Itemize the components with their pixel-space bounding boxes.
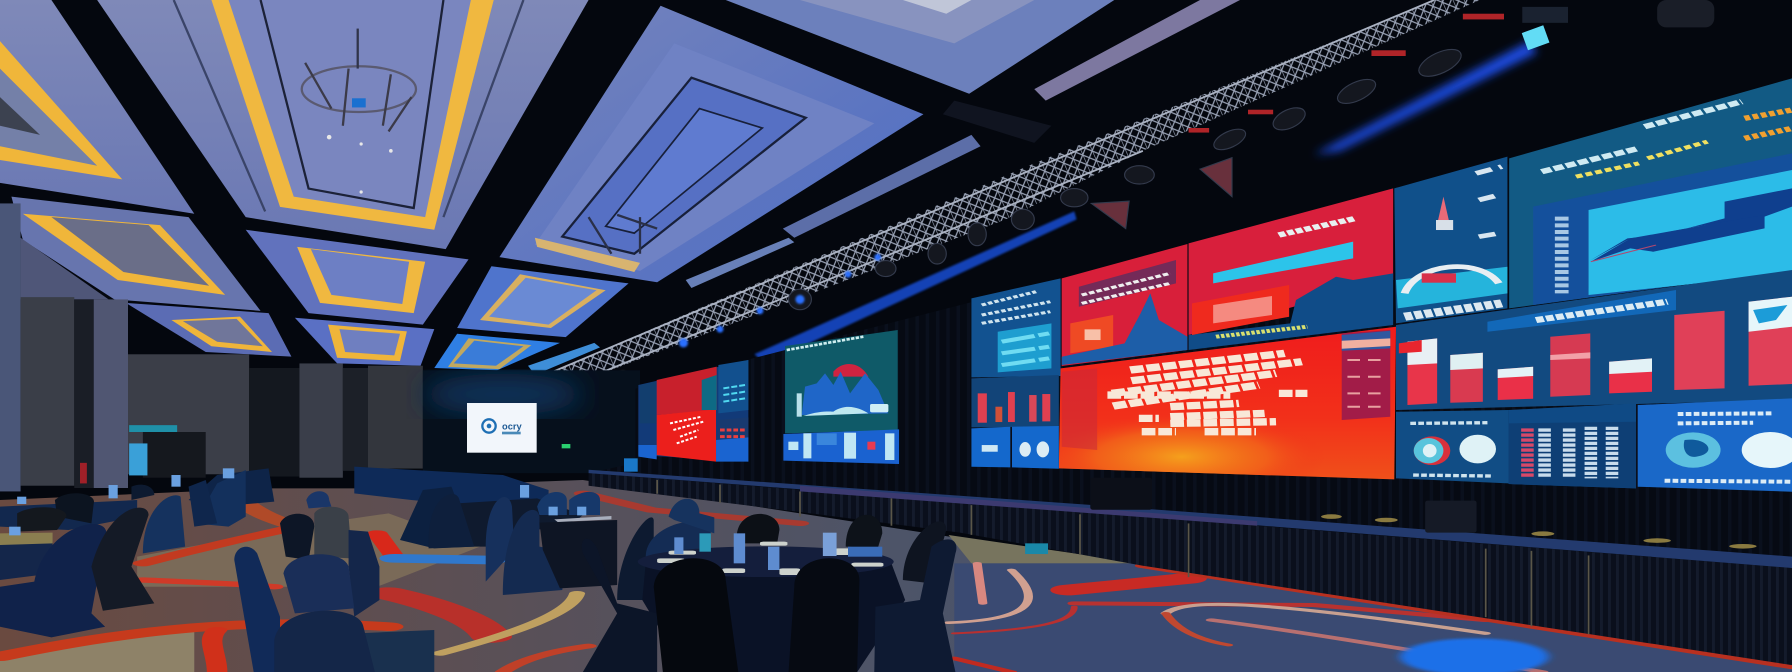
- ceiling panel: row two left: [11, 197, 261, 311]
- screen: red cyan-bar panel: [1189, 188, 1393, 350]
- stage light: upper: [1522, 0, 1714, 50]
- blue light beam: upper: [1314, 41, 1537, 154]
- far projection screen: ocry: [502, 422, 523, 432]
- chair: left 4: [55, 493, 94, 523]
- ceiling panel: row three left: [126, 303, 291, 357]
- stage monitors: [1090, 478, 1477, 533]
- stage sign: [624, 458, 638, 472]
- left back table: [0, 500, 137, 530]
- far centre LED screen: [783, 330, 899, 464]
- ceiling panel: top left: [0, 0, 194, 214]
- mid table: [457, 498, 583, 547]
- ceiling edge blue spots: [437, 373, 526, 393]
- ceiling slots and ducts: [528, 0, 1240, 375]
- screen: area chart panel: [1509, 78, 1792, 308]
- far projection screen: [467, 403, 570, 453]
- furniture: [0, 458, 1048, 672]
- chair: back row: [737, 514, 779, 543]
- stage skirt: [589, 473, 1792, 665]
- truss blue spot lights: [619, 254, 881, 378]
- chair: left 2: [91, 508, 154, 611]
- ceiling spot lights: [327, 135, 393, 194]
- screen: gauge panel: [1394, 157, 1507, 323]
- screen: bar chart panel: [1396, 270, 1792, 410]
- chair: front centre 1: [582, 539, 657, 672]
- screen: bottom donut panel: [1396, 410, 1509, 483]
- dark wall behind LED screens: [589, 91, 1792, 571]
- back rows of chairs: [189, 467, 549, 548]
- ceiling panel: row three right: [434, 334, 560, 370]
- chair: behind slim: [283, 554, 354, 613]
- chairs mid group: [429, 494, 474, 548]
- chair: slim front: [234, 547, 280, 672]
- exit sign: [562, 444, 570, 448]
- skirt highlights: [657, 480, 1589, 634]
- main LED wall: [971, 78, 1792, 500]
- stage-side microphone: [1025, 543, 1048, 554]
- screen: bottom globe panel: [1638, 398, 1792, 492]
- ceiling panel: row three middle: [295, 318, 434, 366]
- chair: front left: [0, 524, 106, 637]
- table: front left: [357, 630, 434, 672]
- chandelier: [302, 29, 416, 131]
- stage top surface: [589, 470, 1792, 568]
- rear walls: [0, 203, 640, 491]
- chair: left 3: [143, 495, 185, 553]
- chair: front low: [274, 611, 375, 672]
- hanging rigs: [789, 14, 1504, 310]
- screen: lower-left tiles: [971, 426, 1059, 469]
- chair: front centre 2: [654, 558, 738, 672]
- blue light beam: lower: [754, 211, 1077, 363]
- chair: mid left tall: [280, 514, 314, 560]
- centre table: [638, 533, 905, 672]
- far LED wall: [638, 360, 748, 462]
- stage front lights: [1321, 514, 1757, 549]
- centre-left table: [539, 520, 617, 588]
- table settings centre-left: [554, 516, 611, 522]
- screen: left data panel: [971, 278, 1061, 377]
- table: mid left: [349, 530, 379, 617]
- ceiling: [0, 0, 1114, 370]
- truss: [551, 0, 1480, 389]
- table glassware: [9, 468, 586, 535]
- carpet: [0, 480, 1792, 672]
- place settings: [657, 542, 883, 575]
- chair: back left column: [189, 480, 217, 527]
- left table: [0, 533, 53, 580]
- screen: big red panel: [1058, 326, 1396, 480]
- ceiling panel: row two right: [457, 266, 629, 337]
- screen: red mountain panel: [1062, 244, 1187, 366]
- ceiling panel: row two middle: [246, 230, 469, 325]
- chair: front centre 4: [874, 539, 956, 672]
- stage: [589, 470, 1792, 665]
- screen: bottom table panel: [1509, 403, 1636, 488]
- ceiling panel: top right: [726, 0, 1114, 94]
- ceiling panel: right large: [499, 6, 923, 282]
- chair: front centre 3: [789, 558, 859, 672]
- table centre glass: [674, 533, 882, 570]
- ceiling panel: top centre: [97, 0, 589, 249]
- screen: lower-left bars: [971, 375, 1059, 427]
